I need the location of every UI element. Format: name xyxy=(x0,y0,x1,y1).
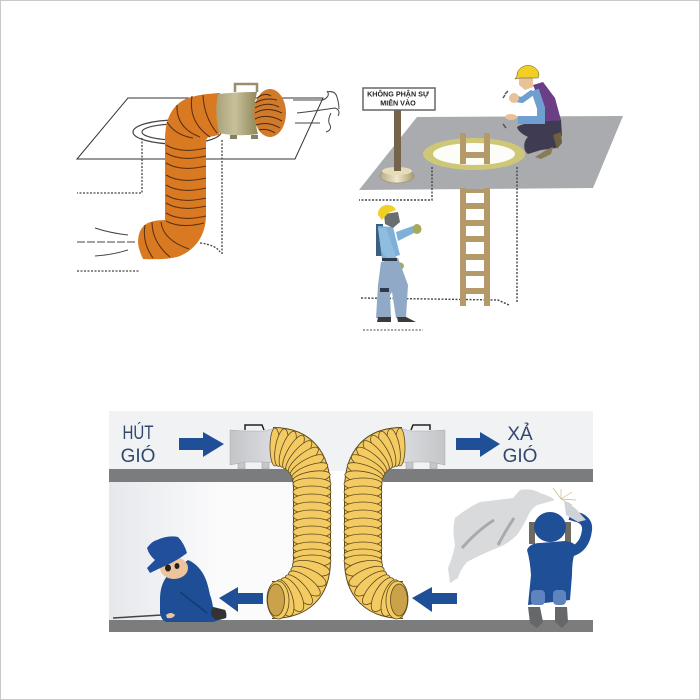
welding sparks xyxy=(553,488,576,505)
panel background xyxy=(109,411,593,471)
arrow: toward kneeling worker xyxy=(219,587,263,612)
left blower and duct xyxy=(230,425,331,619)
sign: KHÔNG PHẬN SỰ xyxy=(367,90,429,98)
arrow: into blower xyxy=(179,432,224,457)
panel: portable blower through manhole xyxy=(77,84,339,271)
arrow: out of blower xyxy=(456,432,500,457)
upper slabs xyxy=(109,469,593,482)
blower drum xyxy=(216,84,258,139)
smoke xyxy=(448,489,555,583)
manhole ring xyxy=(133,120,221,144)
dotted shaft lines xyxy=(77,138,222,271)
heading: suction label: HÚT xyxy=(122,422,154,444)
heading: exhaust label xyxy=(503,423,537,467)
sign: MIỄN VÀO xyxy=(380,98,416,108)
arrow: toward duct mouth xyxy=(412,587,457,612)
welder xyxy=(527,500,587,628)
worker below with respirator xyxy=(376,205,422,322)
ground slab xyxy=(109,620,593,632)
heading: suction label xyxy=(121,422,155,467)
blower xyxy=(230,425,276,469)
ladder xyxy=(460,133,490,306)
dotted lines xyxy=(359,167,517,330)
worker on deck xyxy=(503,65,562,159)
grey deck xyxy=(359,116,623,190)
kneeling worker xyxy=(113,536,226,622)
yellow duct xyxy=(266,428,331,619)
orange flexible duct xyxy=(138,93,220,259)
ring opening xyxy=(423,138,525,170)
heading: exhaust label: XẢ xyxy=(507,423,533,445)
sign xyxy=(363,88,435,183)
heading: suction label: GIÓ xyxy=(121,445,155,467)
airflow in xyxy=(77,228,137,256)
panel: ventilation diagram xyxy=(109,411,593,632)
blower outlet xyxy=(254,89,286,137)
floor plate outline xyxy=(77,98,323,159)
panel: manhole with sign and workers xyxy=(359,65,623,330)
airflow out xyxy=(293,91,339,132)
right blower and duct xyxy=(344,425,445,619)
heading: exhaust label: GIÓ xyxy=(503,445,537,467)
